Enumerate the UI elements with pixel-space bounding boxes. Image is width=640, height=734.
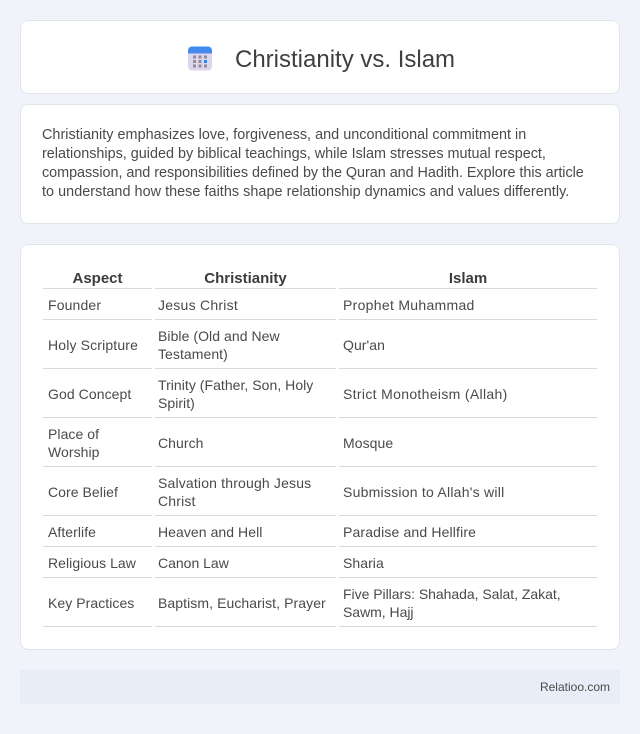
row: God Concept: God Concept <box>48 386 131 402</box>
comparison table: Five Pillars: Shahada, Salat, Zakat, <box>343 586 561 602</box>
intro text: relationships, guided by biblical teachings, while Islam stresses mutual respect, <box>42 146 546 162</box>
intro text: compassion, and responsibilities defined by the Quran and Hadith. Explore this article <box>42 165 584 181</box>
comparison table: Sharia <box>343 555 384 571</box>
table panel <box>20 244 620 650</box>
comparison table: Church <box>158 435 204 451</box>
comparison table: Baptism, Eucharist, Prayer <box>158 595 326 611</box>
header: Aspect: Aspect <box>72 270 123 287</box>
comparison table: Christ <box>158 493 196 509</box>
comparison table: Bible (Old and New <box>158 328 280 344</box>
comparison table: Trinity (Father, Son, Holy <box>158 377 313 393</box>
intro text: Christianity emphasizes love, forgiveness, and unconditional commitment in <box>42 127 526 143</box>
comparison table: Salvation through Jesus <box>158 475 311 491</box>
comparison table: Mosque <box>343 435 393 451</box>
comparison table: Testament) <box>158 346 228 362</box>
comparison table: Strict Monotheism (Allah) <box>343 386 508 402</box>
header: Christianity: Christianity <box>204 270 287 287</box>
row: Religious Law: Religious Law <box>48 555 136 571</box>
comparison table <box>43 270 597 627</box>
comparison table: Heaven and Hell <box>158 524 262 540</box>
icon: calendar <box>188 46 212 70</box>
row: Place of Worship: Worship <box>48 444 100 460</box>
intro text <box>42 127 584 200</box>
header: Islam: Islam <box>449 270 487 287</box>
footer bar <box>20 670 620 704</box>
comparison table: Paradise and Hellfire <box>343 524 476 540</box>
footer credit: Relatioo.com <box>540 680 610 694</box>
comparison table: Jesus Christ <box>158 297 238 313</box>
comparison table: Qur'an <box>343 337 385 353</box>
row: Holy Scripture: Holy Scripture <box>48 337 138 353</box>
intro panel <box>20 104 620 224</box>
comparison table: Spirit) <box>158 395 195 411</box>
comparison table: Sawm, Hajj <box>343 604 414 620</box>
row: Place of Worship <box>48 426 100 460</box>
row: Key Practices: Key Practices <box>48 595 134 611</box>
intro text: to understand how these faiths shape relationship dynamics and values differently. <box>42 184 569 200</box>
title: Christianity vs. Islam <box>235 46 455 73</box>
row: Founder: Founder <box>48 297 101 313</box>
row: Place of Worship: Place of <box>48 426 99 442</box>
comparison table: Canon Law <box>158 555 229 571</box>
comparison table: Prophet Muhammad <box>343 297 475 313</box>
comparison table: Submission to Allah's will <box>343 484 504 500</box>
title panel <box>20 20 620 94</box>
row: Core Belief: Core Belief <box>48 484 118 500</box>
row: Afterlife: Afterlife <box>48 524 96 540</box>
